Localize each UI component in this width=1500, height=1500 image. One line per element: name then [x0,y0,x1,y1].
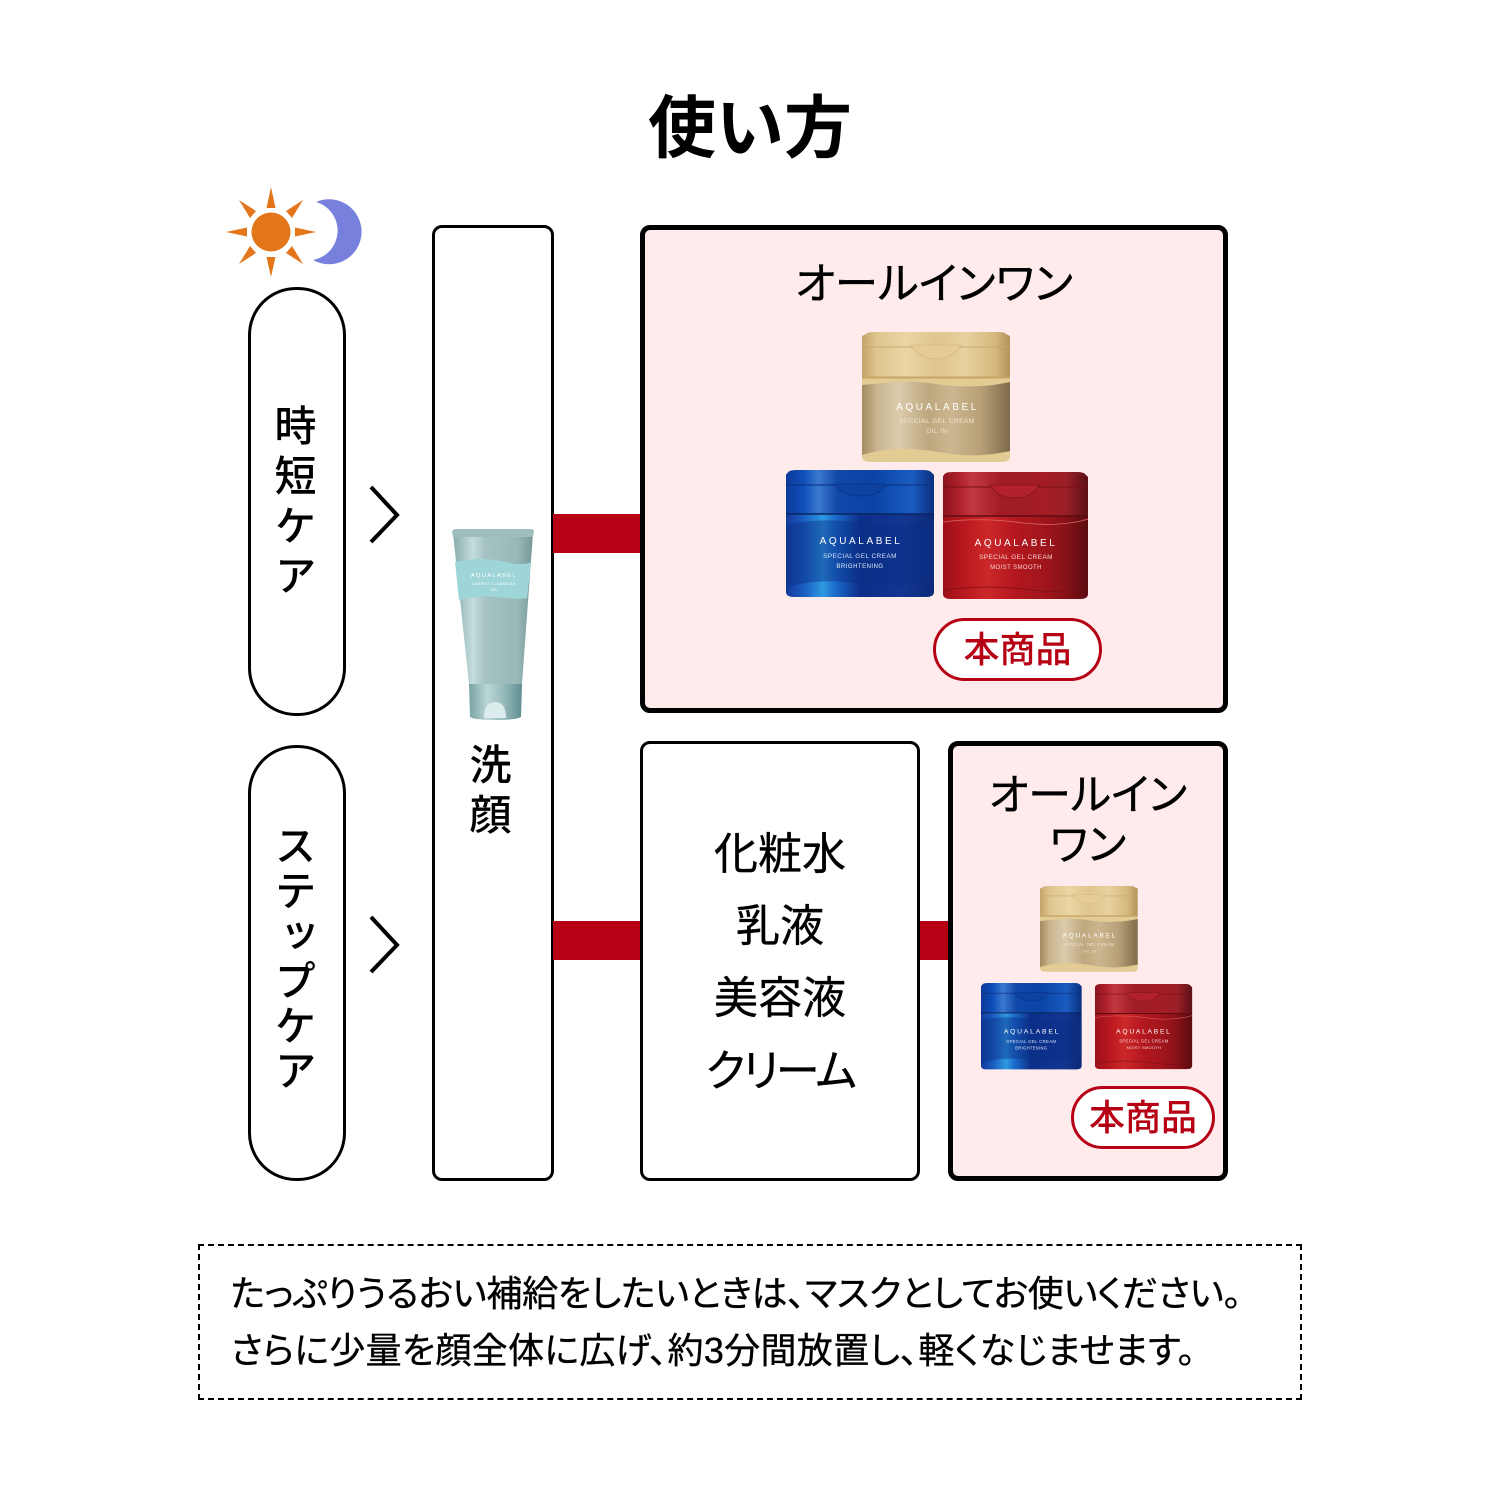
product: three gel cream jars [981,886,1192,1070]
gold jar: SPECIAL GEL CREAM [1065,942,1114,947]
tag: 本商品 [933,618,1102,681]
text: 乳液: 乳液 [736,902,824,951]
arrow: ステップケア [370,916,400,974]
title: 使い方 [648,91,852,167]
red jar [943,472,1088,599]
label: 洗顔: 洗顔 [464,743,511,843]
panel: 化粧水 乳液 美容液 クリーム [640,741,920,1181]
blue jar: BRIGHTENING [1015,1046,1047,1051]
note line 2: さらに少量を顔全体に広げ、約3分間放置し、軽くなじませます。 [230,1330,1196,1371]
gold jar: SPECIAL GEL CREAM [899,418,975,425]
panel: 洗顔 [432,225,554,1181]
pill: 時短ケア: 時短ケア [269,404,316,604]
tag: 本商品 [1071,1086,1215,1149]
gold jar [862,332,1010,462]
icon: sun and moon [226,187,362,277]
product: cleansing gel tube: GEL [490,588,498,592]
connector bar: top [553,514,643,553]
panel: オールインワン bottom [948,741,1228,1181]
product: cleansing gel tube [452,529,534,720]
gold jar: AQUALABEL [1062,932,1117,939]
connector bar: bottom right [918,921,951,960]
blue jar [786,470,934,597]
blue jar: SPECIAL GEL CREAM [1006,1039,1056,1044]
heading: オールインワン [989,772,1187,870]
red jar: AQUALABEL [1116,1029,1172,1036]
red jar: MOIST SMOOTH [990,565,1042,571]
blue jar: SPECIAL GEL CREAM [823,553,897,560]
blue jar: BRIGHTENING [836,564,884,570]
panel: オールインワン top [640,225,1228,713]
text: クリーム: クリーム [706,1047,854,1096]
tag: 本商品: 本商品 [1089,1097,1197,1138]
arrow: 時短ケア [370,486,400,544]
pill: ステップケア [248,745,346,1181]
heading: オールインワン: オールインワン [795,261,1073,309]
connector bar: bottom left [553,921,643,960]
tag: 本商品: 本商品 [963,629,1072,670]
pill: ステップケア: ステップケア [269,824,316,1094]
text: 美容液: 美容液 [714,974,846,1023]
heading: オールインワン: オールイン [989,772,1187,820]
blue jar: AQUALABEL [820,536,902,547]
heading: オールインワン: ワン [1050,822,1126,870]
blue jar [981,983,1082,1069]
product: three gel cream jars [786,332,1088,599]
gold jar: OIL IN [926,429,948,435]
red jar: SPECIAL GEL CREAM [979,554,1053,561]
pill: 時短ケア [248,287,346,716]
gold jar: AQUALABEL [896,402,979,413]
note line 1: たっぷりうるおい補給をしたいときは、マスクとしてお使いください。 [230,1273,1241,1314]
blue jar: AQUALABEL [1004,1028,1060,1035]
text: 化粧水: 化粧水 [714,830,846,879]
product: cleansing gel tube: AQUALABEL [471,573,517,579]
gold jar [1040,886,1138,972]
product: cleansing gel tube: LEMBRO CLEANSING [472,582,516,586]
red jar: SPECIAL GEL CREAM [1119,1038,1169,1043]
gold jar: OIL IN [1082,949,1097,954]
red jar [1095,984,1192,1069]
red jar: MOIST SMOOTH [1127,1045,1161,1050]
note box [198,1244,1302,1400]
red jar: AQUALABEL [975,538,1057,549]
